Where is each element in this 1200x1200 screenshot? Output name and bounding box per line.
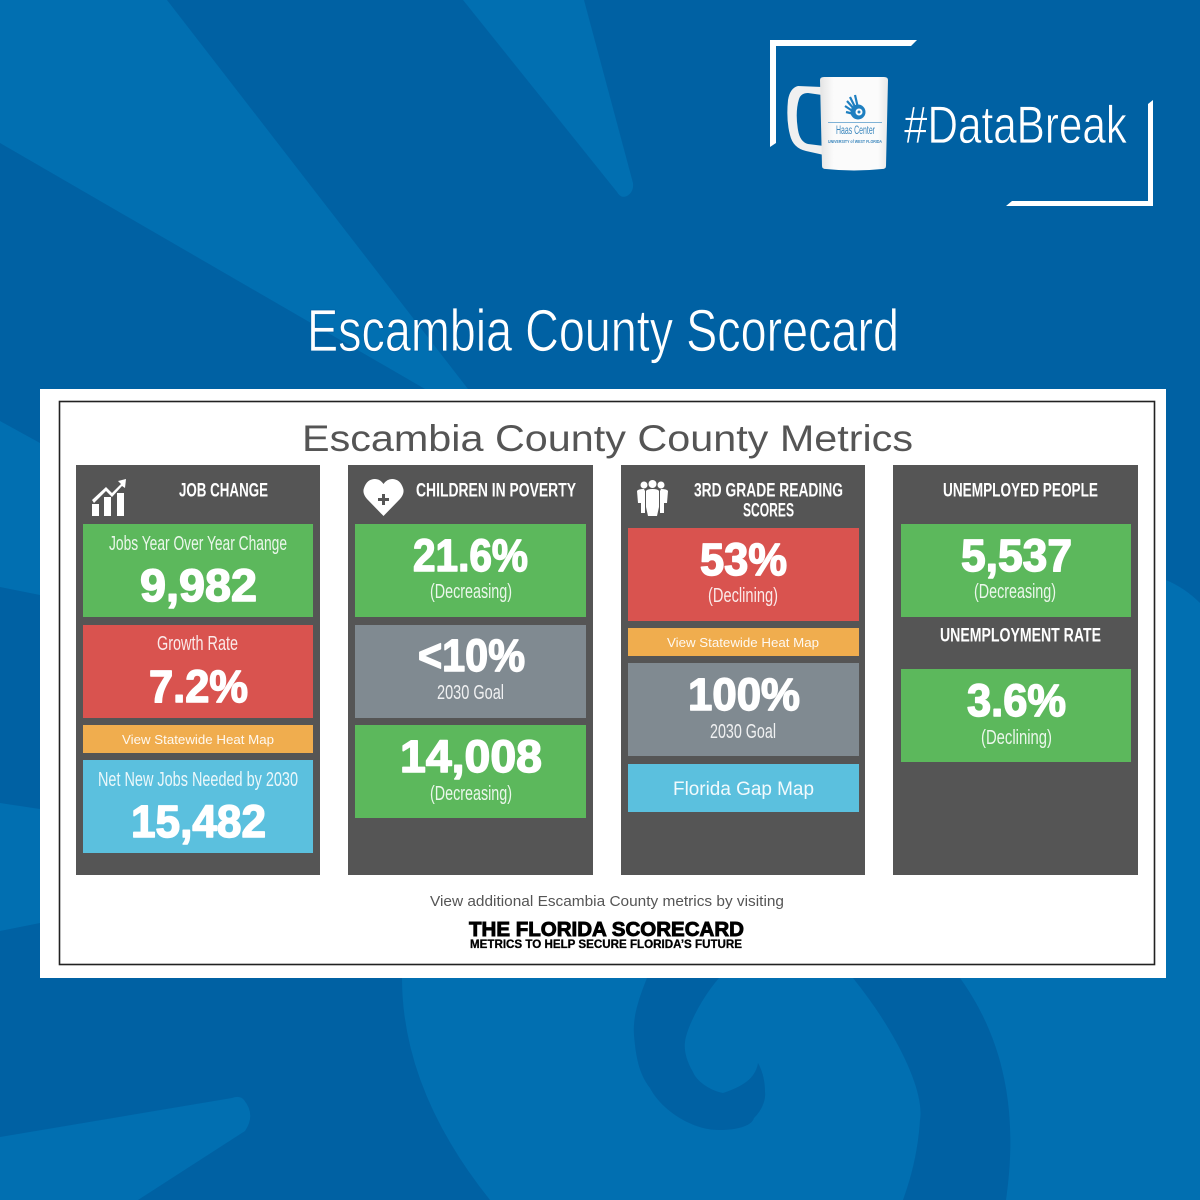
panel: job change: [76, 465, 320, 875]
title: Escambia County Scorecard: [307, 298, 899, 364]
panel: unemployed people: [893, 465, 1138, 875]
card: jobs year over year: 9,982: [140, 560, 257, 611]
card: 53 percent: [628, 528, 859, 621]
card: 5,537: 5,537: [961, 530, 1072, 581]
logo: the florida scorecard: METRICS TO HELP SECURE FLORIDA’S FUTURE: [470, 937, 742, 951]
hashtag heading: #DataBreak: [904, 96, 1127, 155]
button: florida gap map: [628, 764, 859, 812]
panel: 3rd grade reading scores: [621, 465, 865, 875]
card: 3.6 percent: 3.6%: [967, 675, 1066, 726]
card: 5,537: (Decreasing): [974, 581, 1056, 603]
footer note: View additional Escambia County metrics by visiting: [430, 893, 784, 910]
card: 21.6 percent: [355, 524, 586, 617]
button: statewide heat map: [83, 725, 313, 753]
card: growth rate: [83, 625, 313, 718]
card: 3.6 percent: [901, 669, 1131, 762]
card: jobs year over year: Jobs Year Over Year Change: [109, 533, 287, 555]
card: jobs year over year: [83, 524, 313, 617]
card: 5,537: [901, 524, 1131, 617]
icon: Haas Center mug: [787, 77, 888, 170]
card: 21.6 percent: (Decreasing): [430, 581, 512, 603]
logo: the florida scorecard: THE FLORIDA SCORECARD: [469, 919, 744, 941]
card: 2030 goal: [628, 663, 859, 756]
card: 3.6 percent: (Declining): [981, 727, 1052, 749]
card: 2030 goal: 100%: [688, 669, 800, 720]
icon: group of people: [637, 480, 668, 516]
card: 21.6 percent: 21.6%: [413, 530, 528, 581]
card: 53 percent: (Declining): [708, 585, 778, 607]
button: statewide heat map: View Statewide Heat Map: [667, 635, 819, 650]
heading: 3rd grade reading scores: SCORES: [743, 500, 794, 522]
panel: children in poverty: [348, 465, 593, 875]
card: 2030 goal: 2030 Goal: [710, 721, 776, 743]
card: 14,008: (Decreasing): [430, 783, 512, 805]
card: net new jobs: Net New Jobs Needed by 2030: [98, 769, 298, 791]
card: growth rate: 7.2%: [149, 661, 248, 712]
card: growth rate: Growth Rate: [157, 633, 238, 655]
heading: job change: JOB CHANGE: [179, 480, 268, 502]
heading: unemployment rate: UNEMPLOYMENT RATE: [940, 626, 1101, 646]
card: 2030 goal: [355, 625, 586, 718]
card: 14,008: [355, 725, 586, 818]
card: net new jobs: 15,482: [131, 796, 266, 847]
button: florida gap map: Florida Gap Map: [673, 779, 814, 800]
mug label: Haas Center: Haas Center: [836, 125, 875, 137]
icon: heart with plus: [363, 479, 404, 516]
mug label: University of West Florida: UNIVERSITY of WEST FLORIDA: [828, 139, 883, 144]
icon: growth chart: [92, 479, 126, 516]
card: net new jobs: [83, 760, 313, 853]
icon: shell logo: [845, 95, 866, 120]
heading: 3rd grade reading scores: 3RD GRADE READING: [694, 480, 843, 502]
panel: white metrics card: [40, 389, 1166, 978]
card heading: Escambia County County Metrics: [302, 418, 913, 459]
card: 2030 goal: <10%: [418, 630, 525, 681]
button: statewide heat map: View Statewide Heat Map: [122, 732, 274, 747]
hashtag frame: [770, 40, 1153, 206]
button: statewide heat map: [628, 628, 859, 656]
card: 53 percent: 53%: [700, 534, 787, 585]
card: 2030 goal: 2030 Goal: [437, 682, 504, 704]
card: 14,008: 14,008: [400, 731, 542, 782]
heading: 3rd grade reading scores: [694, 480, 843, 522]
logo: the florida scorecard: [469, 919, 744, 951]
heading: children in poverty: CHILDREN IN POVERTY: [416, 480, 576, 502]
heading: unemployed people: UNEMPLOYED PEOPLE: [943, 480, 1098, 502]
